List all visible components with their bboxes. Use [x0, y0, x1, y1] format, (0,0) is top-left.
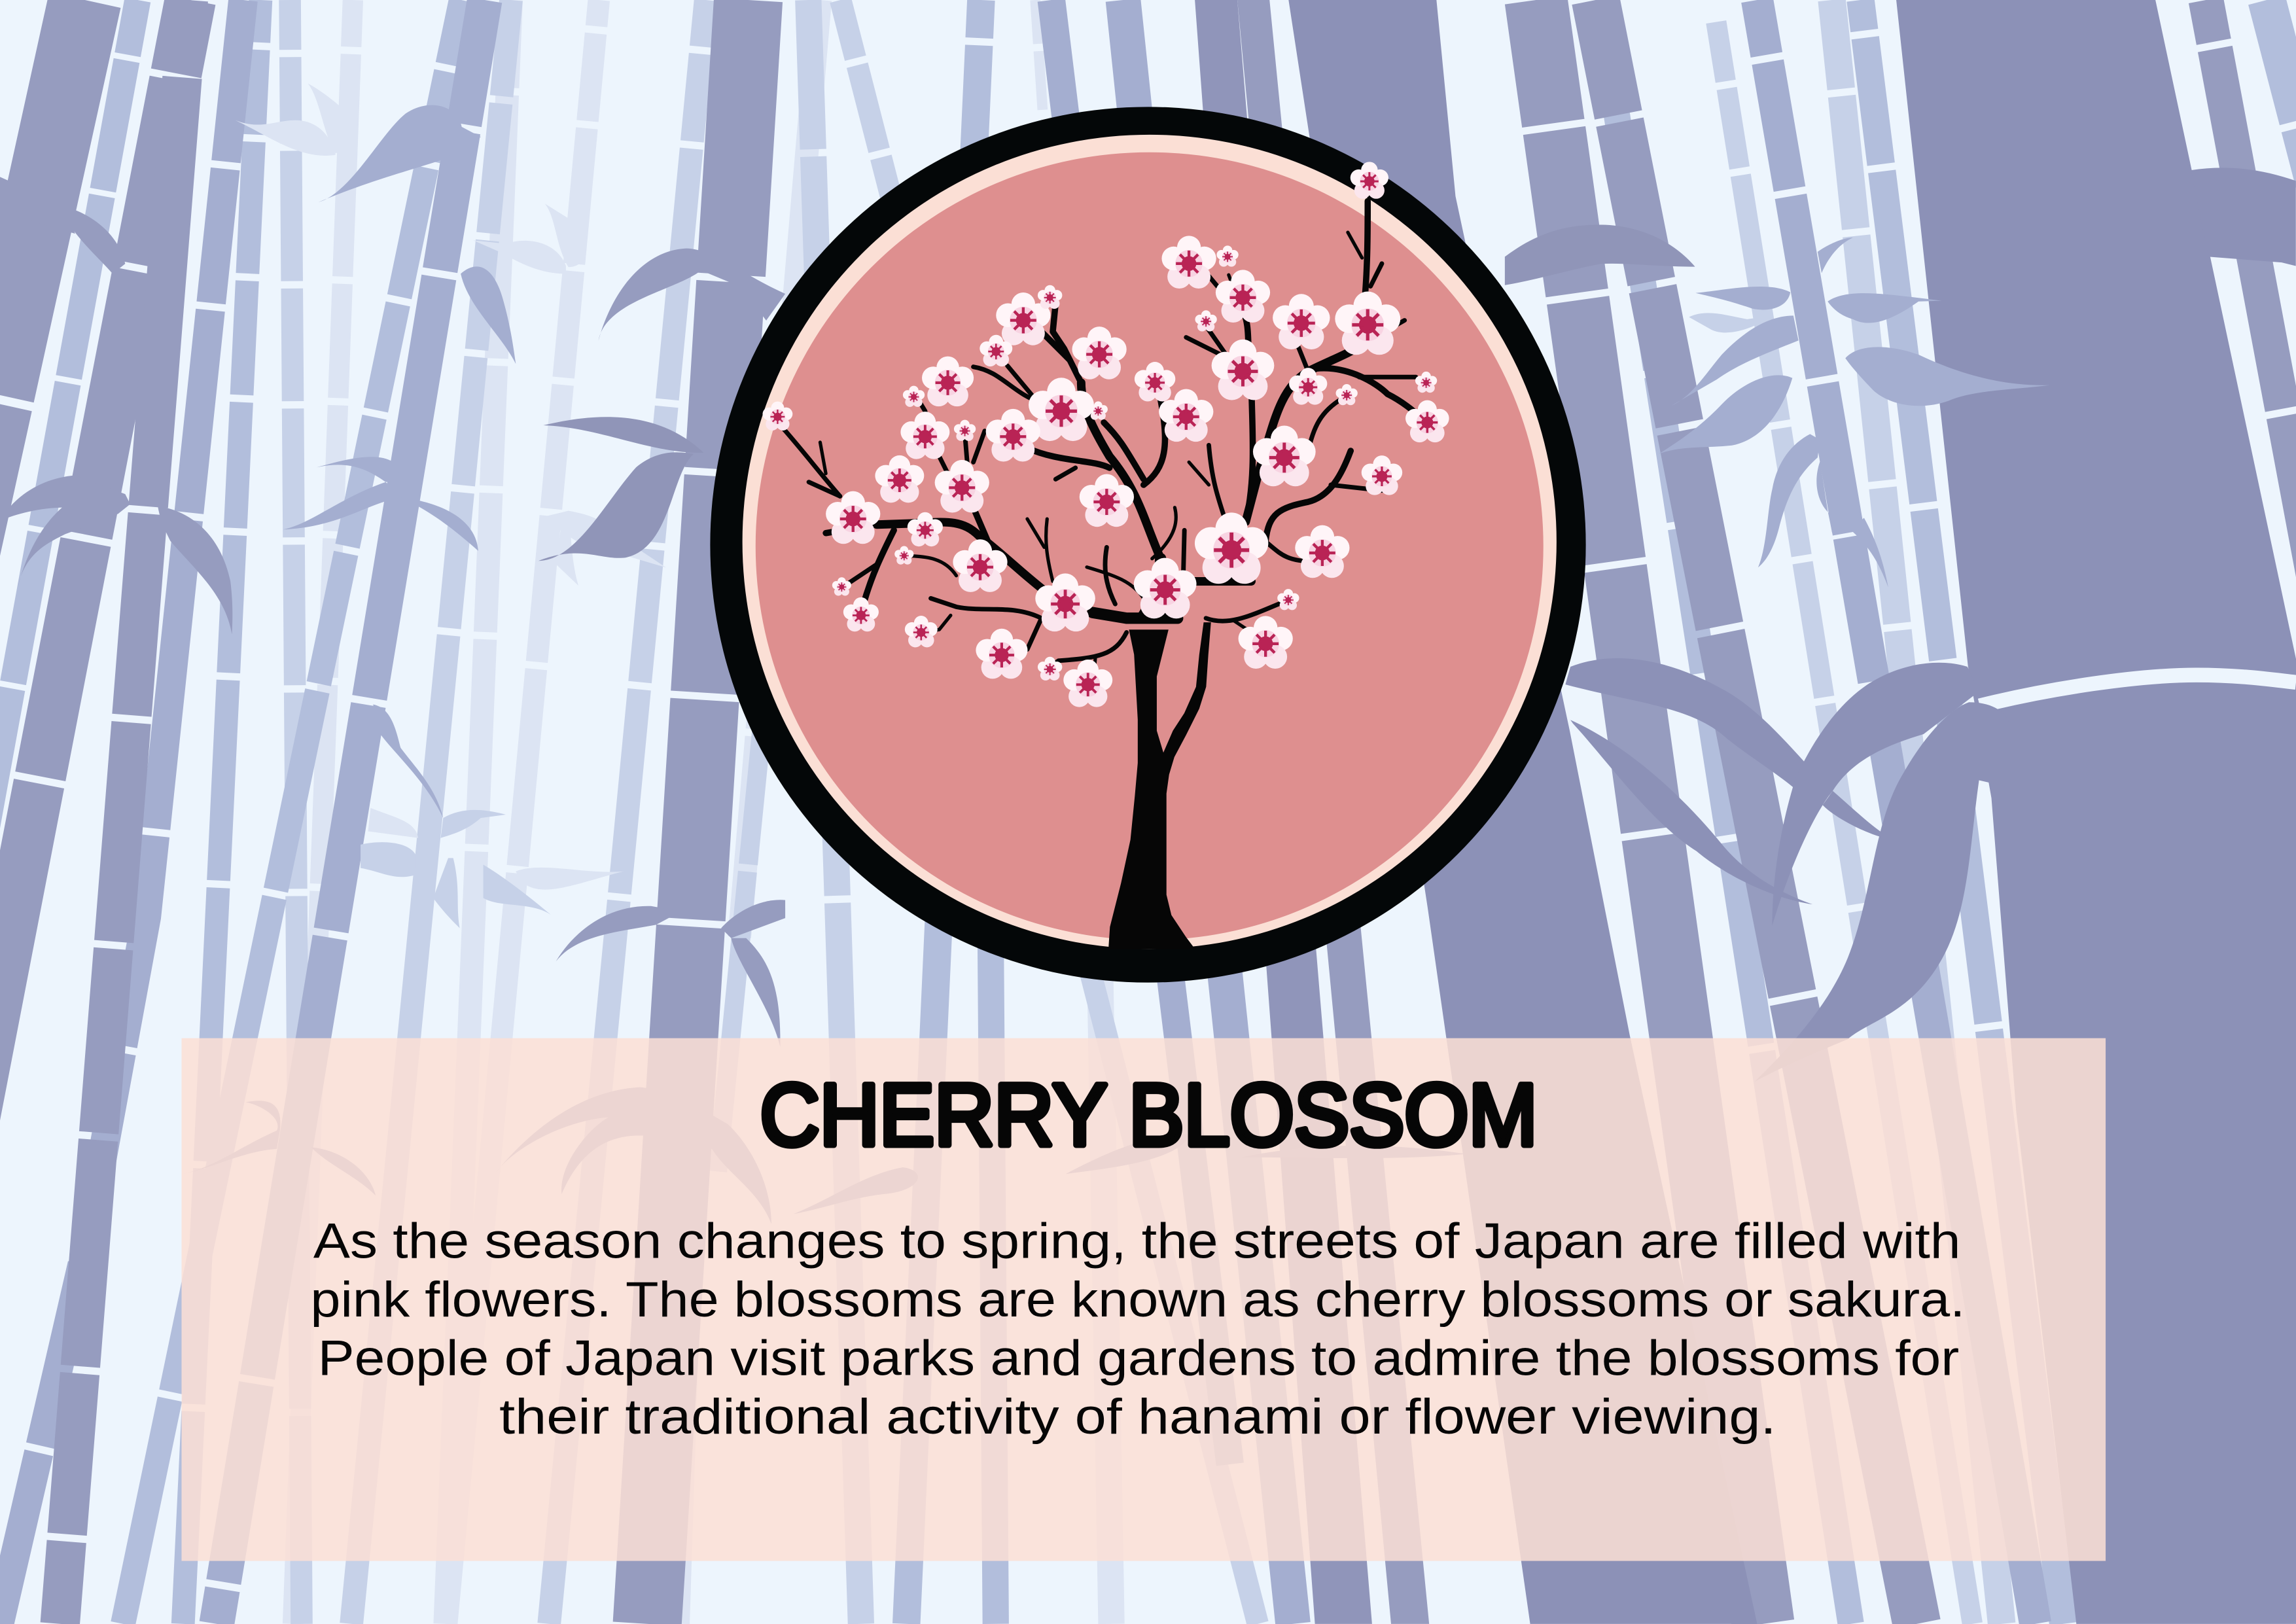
stalk: wide far right	[1896, 0, 2296, 1624]
stalk: upper middle dark	[1195, 0, 1372, 1624]
tree branches	[781, 201, 1424, 678]
bamboo leaves right	[1505, 168, 2296, 1082]
body text: As the season changes to spring, the streets of Japan are filled with	[313, 1213, 1961, 1269]
circle: peach ring	[743, 135, 1557, 949]
body text: People of Japan visit parks and gardens to admire the blossoms for	[318, 1330, 1959, 1386]
tree blossoms	[763, 162, 1449, 707]
circle: pink disc	[756, 152, 1544, 940]
body text: their traditional activity of hanami or flower viewing.	[499, 1389, 1776, 1445]
tree trunk	[1108, 622, 1211, 949]
body text	[310, 1213, 1965, 1445]
bamboo leaves lower, under panel	[183, 1087, 1466, 1224]
stalk: large centre right	[1288, 0, 1757, 1624]
sun medallion with cherry tree	[710, 107, 1586, 983]
bamboo leaves left	[0, 84, 785, 1047]
title: CHERRY BLOSSOM	[760, 1066, 1538, 1164]
stalk: upper middle	[1237, 0, 1429, 1624]
cherry tree crown	[763, 162, 1449, 707]
circle: black ring	[710, 107, 1586, 983]
body text: pink flowers. The blossoms are known as cherry blossoms or sakura.	[310, 1272, 1965, 1328]
info panel	[181, 1038, 2106, 1561]
